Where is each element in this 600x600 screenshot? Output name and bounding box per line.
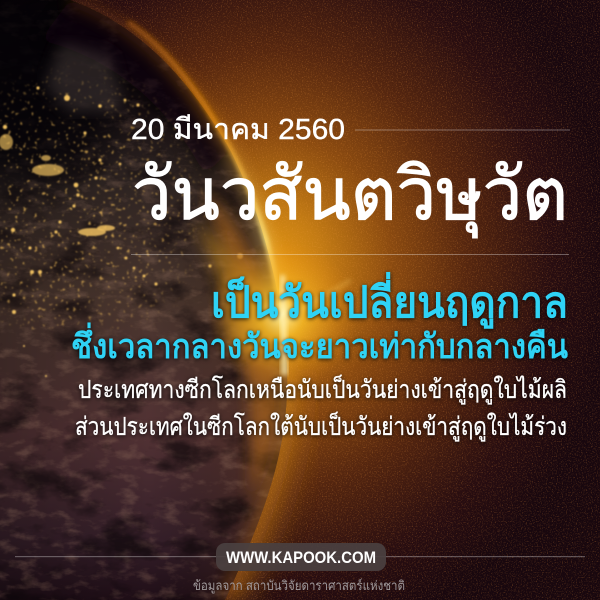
city lights [0, 66, 244, 378]
planet body [0, 0, 300, 600]
lit crescent at the planet's rim [205, 190, 281, 500]
website badge [216, 543, 386, 571]
date rule [355, 130, 570, 131]
date: 20 มีนาคม 2560 [131, 114, 345, 146]
lower glow beside the limb [225, 370, 287, 600]
title: วันวสันตวิษุวัต [132, 155, 568, 238]
footer rule [15, 556, 585, 557]
cloud-lit continent at top [45, 42, 125, 112]
website badge: WWW.KAPOOK.COM [226, 548, 376, 567]
source credit: ข้อมูลจาก สถาบันวิจัยดาราศาสตร์แห่งชาติ [193, 578, 405, 594]
cyan headline 1: เป็นวันเปลี่ยนฤดูกาล [211, 272, 568, 329]
title rule [131, 254, 569, 255]
atmosphere limb [70, 0, 287, 600]
cyan headline 2: ชึ่งเวลากลางวันจะยาวเท่ากับกลางคืน [71, 322, 568, 366]
sun flare [207, 240, 357, 390]
